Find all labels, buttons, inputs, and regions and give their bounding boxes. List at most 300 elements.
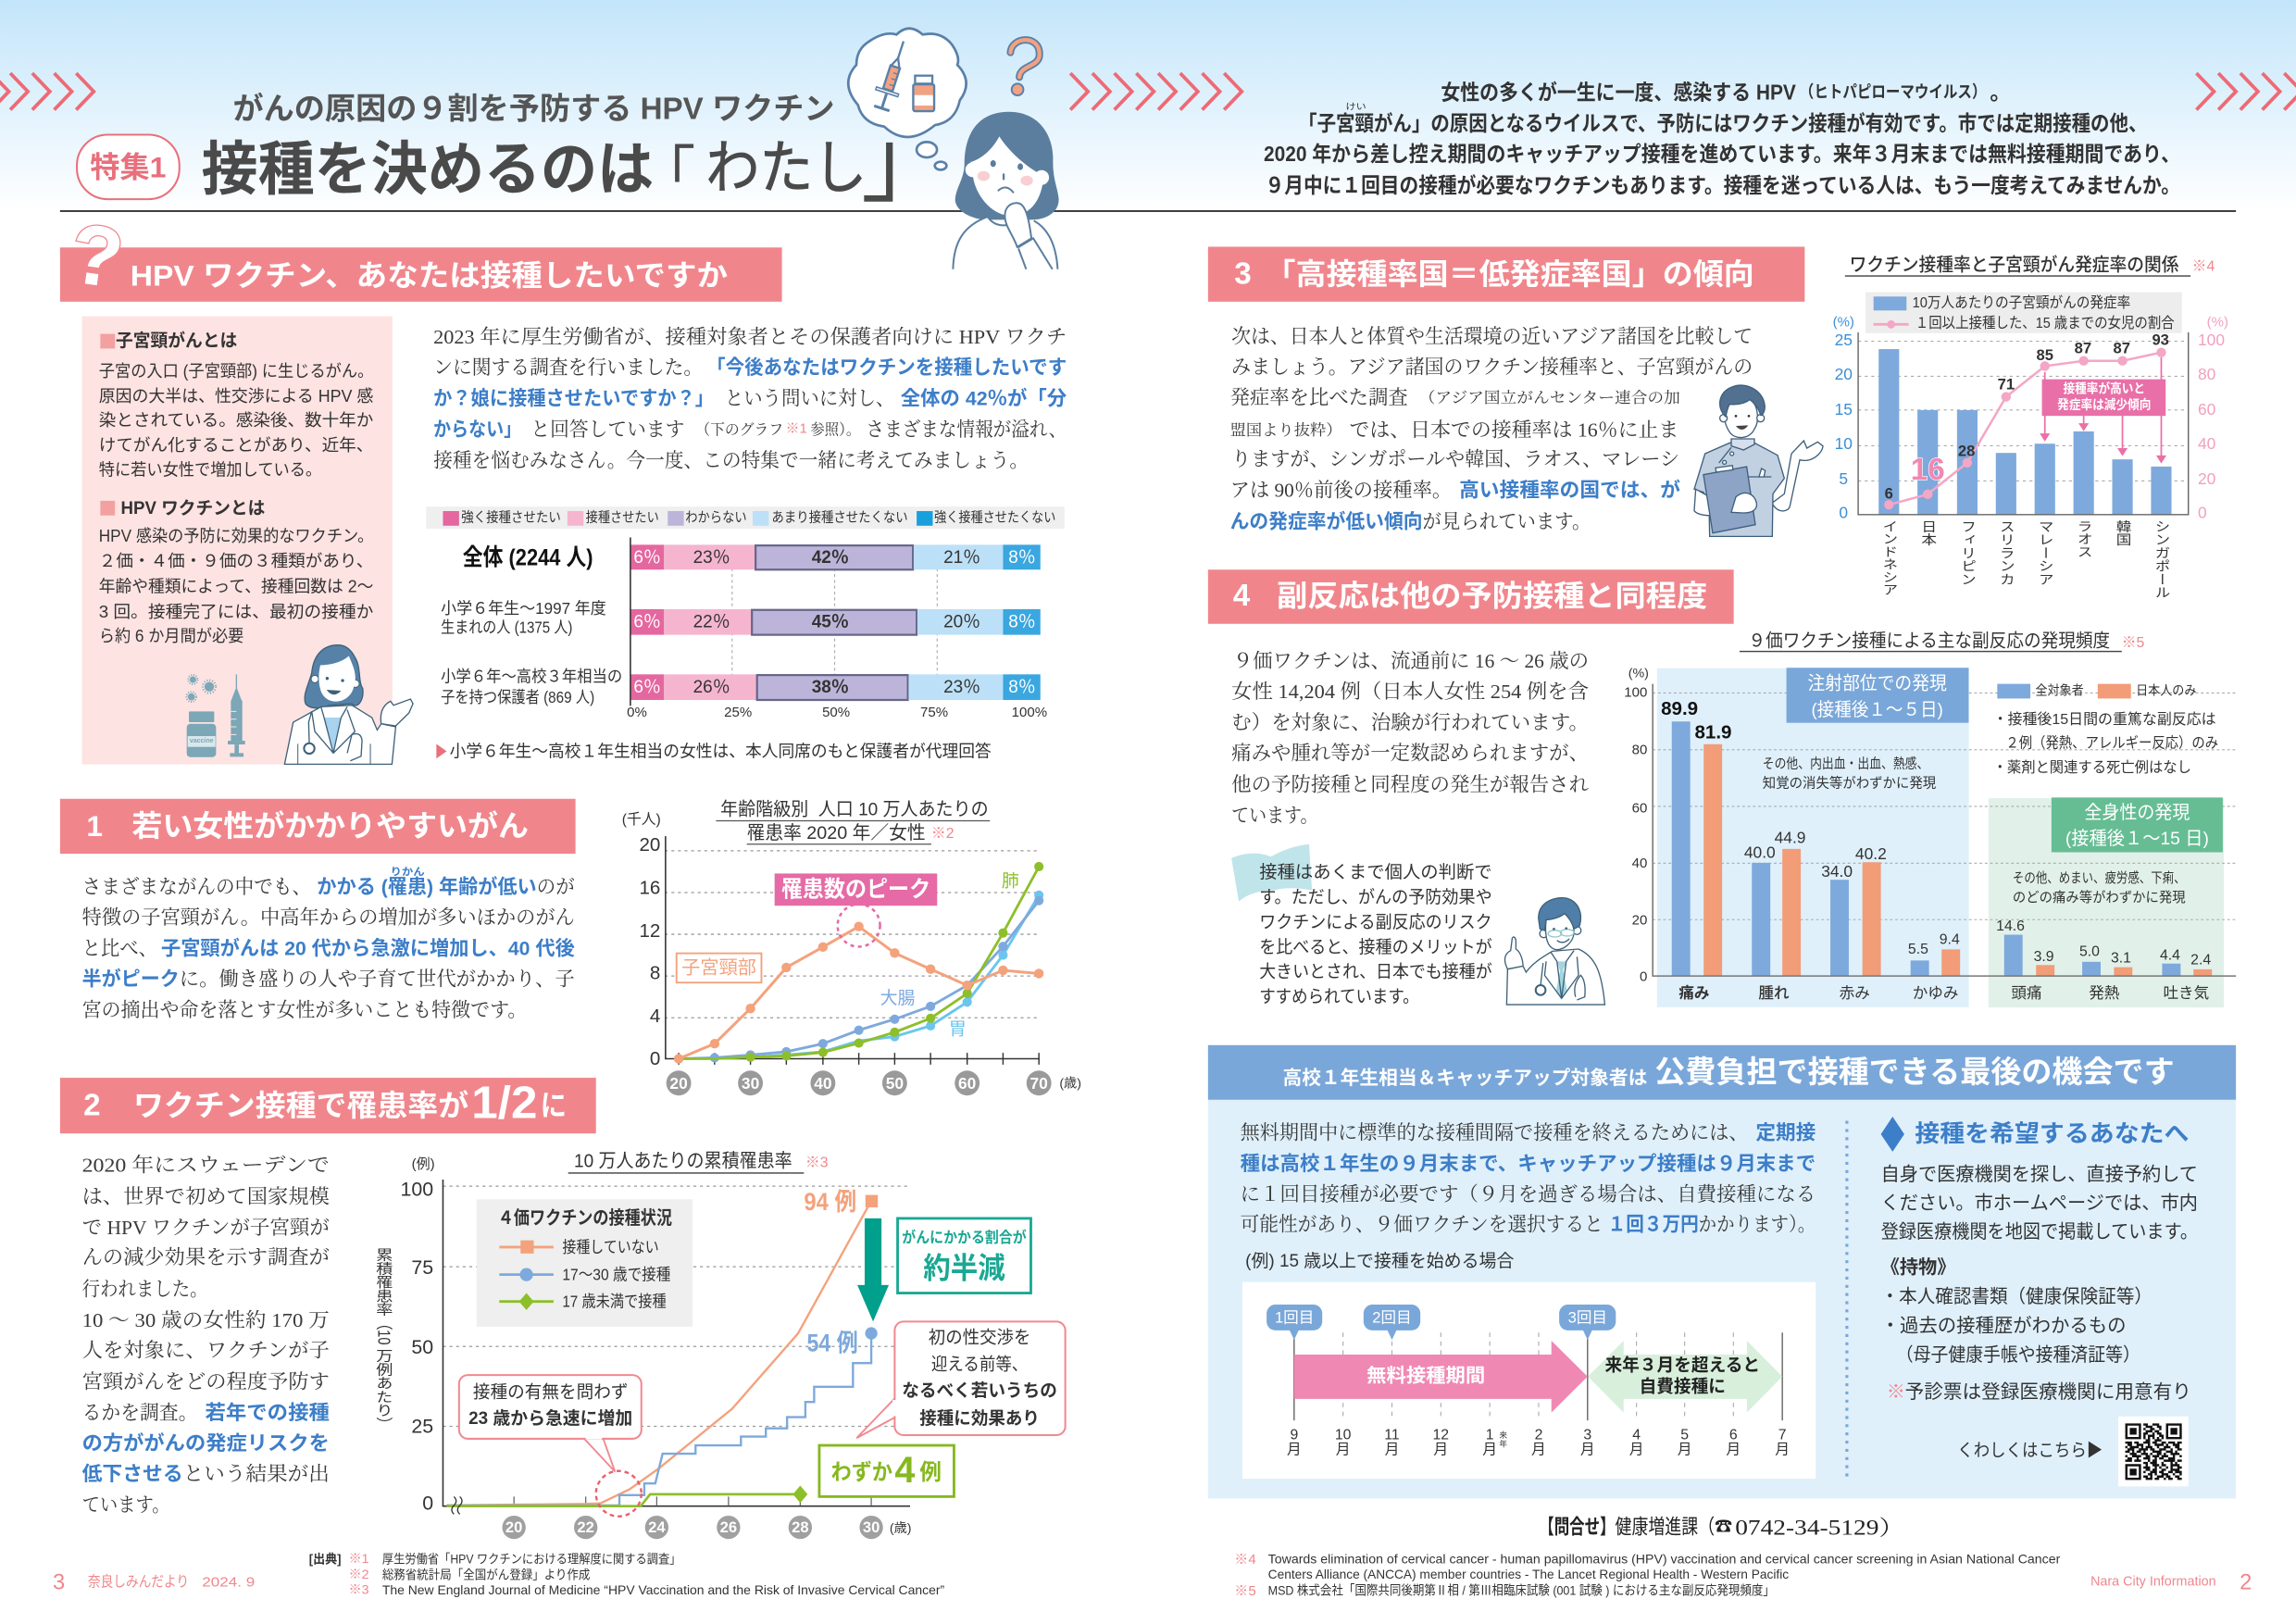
section header 2: に	[541, 1089, 567, 1122]
right axis: 100	[2198, 331, 2225, 349]
bar value labels	[1661, 698, 2211, 968]
age markers: 20	[505, 1518, 522, 1536]
section 1 body text: 子宮頸がんは 20 代から急激に増加し、40 代後	[161, 936, 575, 959]
illustration: thought bubble, question mark and thinking woman	[848, 29, 1059, 269]
chevrons: left	[0, 73, 94, 110]
panel: definitions	[82, 317, 413, 765]
series name labels: 大腸	[880, 988, 916, 1008]
main title: わたし	[705, 136, 867, 201]
axis break mark	[452, 1496, 462, 1514]
month labels: 4	[1632, 1427, 1641, 1443]
panel header	[1208, 1045, 2236, 1100]
marker: dose 3	[1559, 1305, 1616, 1340]
chart: vaccination rate vs incidence	[1833, 255, 2228, 599]
month labels: 6	[1729, 1427, 1738, 1443]
bar row: guardians	[630, 674, 1041, 700]
intro body text: か？娘に接種させたいですか？」	[433, 388, 714, 410]
section 2 body text	[82, 1154, 330, 1516]
references	[1234, 1552, 2061, 1599]
intro lead text: 。	[1990, 81, 2011, 105]
age markers: 28	[792, 1518, 809, 1536]
references: Towards elimination of cervical cancer - human papillomavirus (HPV) vaccination and cervical cancer screening in Asian National Cancer	[1268, 1552, 2061, 1567]
right axis: (%)	[2207, 314, 2228, 330]
row labels: 全体 (2244 人)	[463, 545, 593, 571]
line value labels: 87	[2075, 339, 2091, 356]
panel header: 公費負担で接種できる最後の機会です	[1654, 1056, 2175, 1090]
section 2 body text: ています。	[82, 1493, 169, 1516]
legend: 接種していない	[562, 1238, 659, 1256]
age circles: 70	[1030, 1074, 1048, 1093]
intro body text: からない」	[433, 418, 521, 441]
chart: adverse reactions	[1624, 631, 2236, 1007]
section header 1: 1	[86, 809, 103, 843]
country labels	[1880, 519, 2170, 599]
note about proxy answers: 小学６年生～高校１年生相当の女性は、本人同席のもと保護者が代理回答	[450, 742, 992, 760]
series name labels: 胃	[949, 1019, 967, 1039]
panel: systemic reactions	[1989, 798, 2224, 1007]
panel: injection-site reactions	[1657, 668, 1969, 1007]
timeline panel	[1242, 1282, 1816, 1479]
instructions text: 自身で医療機関を探し、直接予約して	[1881, 1164, 2198, 1185]
left axis: 15	[1835, 400, 1853, 418]
panel text: かかります）。	[1699, 1214, 1816, 1236]
note: injection site: 知覚の消失等がわずかに発現	[1763, 775, 1936, 792]
category labels: かゆみ	[1913, 984, 1958, 1002]
references: ※5	[1234, 1583, 1256, 1599]
intro body text: 接種を悩むみなさん。今一度、この特集で一緒に考えてみましょう。	[433, 449, 1029, 471]
row labels: 生まれの人 (1375 人)	[441, 618, 572, 637]
section 3 body text	[1230, 325, 1753, 532]
footer left	[53, 1571, 255, 1595]
female doctor	[284, 645, 413, 764]
bar row: all respondents: 21％	[943, 548, 980, 568]
contact line: 【問合せ】	[1539, 1515, 1616, 1538]
bar row: grade 6 to 1997 births: 20％	[943, 613, 980, 632]
right axis: 20	[2198, 469, 2215, 488]
section 4 body text: む）を対象に、治験が行われています。	[1231, 712, 1589, 734]
percent axis labels: 100%	[1012, 705, 1047, 720]
footer left: 奈良しみんだより	[88, 1573, 189, 1590]
callout: about half: 約半減	[923, 1252, 1005, 1285]
section 1 body text: 半がピーク	[82, 968, 180, 991]
percent axis labels	[627, 705, 1047, 720]
callout: only 4 cases: 例	[919, 1460, 942, 1485]
subtitle: がんの原因の９割を予防する HPV ワクチン	[232, 91, 835, 126]
chart title	[716, 800, 990, 844]
month labels: 1	[1486, 1427, 1494, 1443]
instructions text: ※	[1887, 1382, 1905, 1403]
row labels: 小学６年～高校３年相当の	[441, 668, 622, 686]
section 1 body text	[82, 866, 575, 1021]
note text: を比べると、接種のメリットが	[1259, 937, 1492, 957]
country labels: 日本	[1919, 519, 1937, 546]
bar value labels: 5.5	[1908, 942, 1928, 957]
footer right: Nara City Information	[2090, 1574, 2216, 1590]
intro body text: 全体の 42％が「分	[901, 387, 1067, 410]
callout: rapid increase from 23: 接種の有無を問わず	[473, 1382, 629, 1403]
note text: 接種はあくまで個人の判断で	[1259, 862, 1492, 882]
callout: higher rate lower incidence: 発症率は減少傾向	[2057, 396, 2151, 413]
intro body text: 「今後あなたはワクチンを接種したいです	[706, 356, 1067, 379]
month labels: 5	[1680, 1427, 1689, 1443]
chart title: ※3	[805, 1155, 829, 1170]
QR code	[2118, 1417, 2189, 1486]
chart: cumulative incidence: 94 例	[804, 1188, 856, 1216]
bar value labels: 14.6	[1996, 918, 2025, 934]
panel: definitions: けてがん化することがあり、近年、	[99, 436, 373, 455]
age circles: 30	[742, 1074, 759, 1093]
month labels: 月	[1531, 1442, 1546, 1457]
section header 4: 4	[1233, 579, 1251, 613]
chart title: 年齢階級別 人口 10 万人あたりの	[720, 800, 989, 820]
chart title: ワクチン接種率と子宮頸がん発症率の関係	[1850, 255, 2179, 275]
marker: dose 1	[1267, 1305, 1322, 1340]
panel text: (例) 15 歳以上で接種を始める場合	[1245, 1251, 1514, 1271]
section 4 body text: ています。	[1231, 805, 1317, 827]
note: injection site: その他、内出血・出血、熱感、	[1763, 756, 1928, 771]
y axis numbers	[401, 1178, 433, 1515]
age markers: 24	[648, 1518, 666, 1536]
age markers: 22	[577, 1518, 594, 1536]
icon: vial	[913, 76, 934, 111]
series: vaccinated age 17 to 30	[446, 1327, 878, 1505]
panel: definitions: ２価・４価・９価の３種類があり、	[99, 552, 373, 570]
section header 2: 1/2	[471, 1079, 537, 1129]
section 2 body text: で HPV ワクチンが子宮頸が	[82, 1217, 330, 1239]
sources list: ※3	[348, 1583, 369, 1598]
y axis labels: 4	[650, 1006, 660, 1027]
row labels: 子を持つ保護者 (869 人)	[441, 688, 594, 706]
right axis: 0	[2198, 504, 2207, 522]
chart legend	[426, 506, 1065, 529]
section 3 body text: 次は、日本人と体質や生活環境の近いアジア諸国を比較して	[1231, 325, 1753, 347]
section 1 body text: りかん	[391, 866, 425, 878]
header: injection site: (接種後１～５日)	[1811, 700, 1943, 720]
note text: すすめられています。	[1259, 988, 1419, 1007]
panel: definitions: 子宮の入口 (子宮頸部) に生じるがん。	[99, 362, 373, 381]
arrow: free period: 無料接種期間	[1366, 1366, 1485, 1387]
category labels: 赤み	[1840, 984, 1870, 1002]
callout: only 4 cases: わずか	[831, 1460, 892, 1485]
y axis numbers: 25	[411, 1415, 433, 1437]
panel text: 無料期間中に標準的な接種間隔で接種を終えるためには、	[1241, 1122, 1748, 1144]
icon: question mark	[1010, 40, 1040, 95]
bar value labels: 2.4	[2190, 953, 2211, 968]
label: cervix	[677, 954, 761, 982]
intro body text: ※1	[786, 420, 807, 436]
chevrons: center	[1070, 73, 1242, 110]
bar row: all respondents: 23％	[693, 548, 730, 568]
callout: early vaccination effective: 初の性交渉を	[929, 1327, 1030, 1347]
bar value labels: 40.2	[1855, 844, 1887, 863]
month labels: 月	[1580, 1442, 1595, 1457]
category labels: 痛み	[1678, 983, 1710, 1002]
bar value labels: 40.0	[1744, 843, 1776, 861]
chart legend: あまり接種させたくない	[772, 510, 908, 526]
percent axis labels: 75%	[920, 705, 948, 720]
section 3 body text: りますが、シンガポールや韓国、ラオス、マレーシ	[1231, 448, 1679, 470]
arrow: self-pay period: 自費接種に	[1640, 1377, 1726, 1397]
y axis labels: 0	[1640, 968, 1647, 984]
bar row: grade 6 to 1997 births	[630, 609, 1041, 635]
y axis labels: 60	[1632, 801, 1647, 817]
month labels: 月	[1678, 1442, 1692, 1457]
legend: 17 歳未満で接種	[562, 1293, 667, 1311]
y axis labels	[639, 834, 660, 1069]
right axis: 40	[2198, 434, 2215, 453]
legend: 17～30 歳で接種	[562, 1266, 670, 1284]
icon: open book	[1231, 844, 1312, 901]
age markers: (歳)	[890, 1520, 912, 1536]
panel text: １回３万円	[1608, 1214, 1699, 1236]
y axis labels: 80	[1632, 742, 1647, 757]
category labels: 腫れ	[1758, 984, 1790, 1002]
month labels: 年	[1499, 1438, 1507, 1448]
note text: す。ただし、がんの予防効果や	[1259, 887, 1492, 907]
icon: viruses	[186, 675, 216, 702]
intro body text	[433, 326, 1067, 471]
section 3 body text: では、日本での接種率は 16％に止ま	[1349, 419, 1678, 442]
legend: ４価ワクチンの接種状況	[498, 1208, 672, 1229]
panel: definitions: ら約 6 か月間が必要	[99, 627, 243, 645]
age markers	[503, 1516, 912, 1539]
age circles: 20	[669, 1074, 688, 1093]
note: systemic: その他、めまい、疲労感、下痢、	[2013, 870, 2186, 886]
section 4 body text: 痛みや腫れ等が一定数認められますが、	[1231, 743, 1589, 765]
right axis: 60	[2198, 400, 2215, 418]
y axis labels: 8	[650, 962, 660, 983]
main title: 接種を決めるのは	[201, 137, 654, 202]
section 3 body text: （アジア国立がんセンター連合の加	[1419, 389, 1680, 406]
percent axis labels: 25%	[724, 705, 752, 720]
chart title: 10 万人あたりの累積罹患率	[574, 1151, 792, 1172]
left axis: 0	[1839, 504, 1848, 522]
section 2 body text: という結果が出	[183, 1463, 330, 1485]
y axis numbers: 75	[411, 1256, 433, 1279]
section 2 body text: 10 ～ 30 歳の女性約 170 万	[82, 1309, 330, 1331]
series: stomach	[679, 891, 1043, 1059]
arrow: reduction	[857, 1218, 889, 1321]
sources list: ※2	[348, 1568, 369, 1582]
thinking woman	[953, 112, 1059, 269]
contact line	[1539, 1515, 1904, 1539]
bar value labels: 3.1	[2111, 951, 2131, 967]
chart title: ※2	[931, 826, 955, 842]
callout: higher rate lower incidence: 接種率が高いと	[2064, 381, 2145, 397]
line value labels: 93	[2152, 331, 2169, 348]
country labels: スリランカ	[1997, 519, 2015, 586]
series name labels: 肺	[1002, 871, 1019, 892]
callout: early vaccination effective: 迎える前等、	[931, 1355, 1028, 1375]
sources list: [出典]	[309, 1551, 342, 1566]
y axis numbers: 50	[411, 1336, 433, 1358]
section 3 body text: みましょう。アジア諸国のワクチン接種率と、子宮頸がんの	[1231, 356, 1753, 379]
sources list: ※1	[348, 1552, 369, 1567]
section 2 body text: んの減少効果を示す調査が	[82, 1246, 330, 1268]
section 2 body text: るかを調査。	[82, 1402, 198, 1424]
intro body text: 2023 年に厚生労働省が、接種対象者とその保護者向けに HPV ワクチ	[433, 326, 1067, 348]
panel: definitions: HPV ワクチンとは	[121, 498, 265, 518]
month labels: 10	[1335, 1427, 1352, 1443]
section 4 body text: 他の予防接種と同程度の発生が報告され	[1231, 774, 1590, 796]
main title	[201, 111, 952, 213]
month labels: 11	[1384, 1427, 1400, 1443]
intro lead text: 女性の多くが一生に一度、感染する HPV	[1441, 81, 1797, 105]
section header 4	[1208, 569, 1734, 624]
arrow: self-pay period: 来年３月を超えると	[1604, 1355, 1760, 1376]
section 2 body text: 低下させる	[82, 1463, 183, 1485]
y axis labels: 40	[1632, 856, 1647, 871]
top sky gradient background	[0, 0, 2296, 212]
bar row: guardians: 6％	[633, 678, 661, 697]
main title: 」	[861, 111, 952, 213]
intro body text: と回答しています	[530, 418, 684, 441]
y axis title: 累積罹患率（10 万例あたり）	[374, 1248, 393, 1430]
series: vaccinated under 17	[446, 1486, 807, 1506]
note text	[1259, 862, 1492, 1007]
line: vaccination rate	[1884, 347, 2166, 509]
label: cervix: 子宮頸部	[681, 957, 756, 978]
legend: 全対象者	[2035, 683, 2084, 699]
thought bubble	[848, 29, 967, 169]
bar row: all respondents: 8％	[1008, 548, 1036, 568]
y axis labels: (%)	[1628, 667, 1649, 681]
illustration: nurse with clipboard	[1694, 385, 1823, 536]
section header 3: 3	[1234, 256, 1252, 291]
section 1 body text: のが	[537, 876, 575, 898]
panel text: に１回目接種が必要です（９月を過ぎる場合は、自費接種になる	[1241, 1183, 1816, 1206]
icons and female doctor illustration	[186, 645, 413, 764]
month labels: 月	[1775, 1442, 1790, 1457]
month labels: 月	[1385, 1442, 1399, 1457]
footer right: 2	[2240, 1571, 2252, 1595]
section 3 body text: 発症率を比べた調査	[1230, 387, 1408, 409]
month labels: 来	[1499, 1430, 1507, 1440]
bar value labels: 34.0	[1821, 862, 1853, 881]
section header 4: 副反応は他の予防接種と同程度	[1277, 580, 1707, 613]
intro lead text: けい	[1346, 103, 1366, 113]
y axis labels	[1624, 667, 1649, 984]
section 2 body text: 人を対象に、ワクチンが子	[82, 1340, 330, 1362]
y axis labels: 16	[639, 878, 660, 899]
bar row: grade 6 to 1997 births: 8％	[1008, 613, 1036, 632]
chart legend: 接種させたい	[586, 510, 659, 526]
category labels: 発熱	[2089, 984, 2120, 1002]
icon: vaccine vial	[187, 711, 216, 757]
main title: 「	[637, 142, 695, 206]
legend	[1866, 293, 2182, 333]
instructions text	[1881, 1164, 2198, 1403]
section 2 body text: 若年での接種	[205, 1402, 330, 1424]
section 4 body text: 女性 14,204 例（日本人女性 254 例を含	[1231, 681, 1589, 703]
section header 1: 若い女性がかかりやすいがん	[131, 809, 529, 843]
section header 2: 2	[83, 1089, 101, 1123]
header: systemic: (接種後１～15 日)	[2065, 829, 2209, 849]
y axis numbers: 100	[401, 1178, 433, 1200]
intro lead text	[1264, 81, 2180, 197]
chart title: 罹患率 2020 年／女性	[747, 823, 926, 843]
intro lead text: （ヒトパピローマウイルス）	[1800, 83, 1986, 102]
month labels: 月	[1287, 1442, 1302, 1457]
bar row: all respondents: 42％	[812, 548, 849, 568]
serious reactions note	[1993, 711, 2218, 776]
bars: Japanese only	[1703, 744, 2212, 976]
y axis labels: 0	[650, 1048, 660, 1069]
chart: cumulative incidence: (例)	[412, 1156, 435, 1172]
panel: definitions: 3 回。接種完了には、最初の接種か	[99, 603, 373, 621]
right axis: 80	[2198, 365, 2215, 383]
instructions text: ・過去の接種歴がわかるもの	[1881, 1315, 2127, 1336]
sources list	[309, 1551, 944, 1598]
label: peak: 罹患数のピーク	[781, 876, 930, 902]
callout: higher rate lower incidence	[2042, 380, 2165, 416]
country labels: ラオス	[2075, 519, 2092, 558]
panel: last chance with public funding	[1208, 1045, 2236, 1498]
link to details: くわしくはこちら▶	[1957, 1442, 2103, 1461]
note: systemic	[2013, 870, 2186, 906]
chart title: ※4	[2192, 258, 2215, 274]
sources list: The New England Journal of Medicine “HPV Vaccination and the Risk of Invasive Cervical Cancer”	[382, 1583, 944, 1597]
callout: early vaccination effective: なるべく若いうちの	[902, 1380, 1057, 1401]
bar row: grade 6 to 1997 births: 22％	[693, 613, 730, 632]
legend	[477, 1199, 693, 1327]
header: systemic	[2052, 797, 2223, 852]
y axis labels: 20	[639, 834, 660, 856]
right axis	[2198, 314, 2228, 522]
section 3 body text: 高い接種率の国では、が	[1459, 478, 1680, 501]
instructions text: ・本人確認書類（健康保険証等）	[1881, 1286, 2152, 1307]
instructions text: （母子健康手帳や接種済証等）	[1896, 1344, 2140, 1366]
country labels: シンガポール	[2152, 519, 2170, 599]
row labels	[441, 545, 622, 706]
chart title: ９価ワクチン接種による主な副反応の発現頻度	[1748, 631, 2110, 652]
chevrons: right	[2196, 73, 2296, 110]
callout: early vaccination effective: 接種に効果あり	[919, 1408, 1040, 1429]
intro body text: 参照）。	[810, 421, 860, 439]
section 4 body text: ９価ワクチンは、流通前に 16 ～ 26 歳の	[1233, 650, 1589, 672]
contact line: 0742-34-5129）	[1735, 1516, 1904, 1539]
row labels: 小学６年生～1997 年度	[441, 599, 606, 618]
section header: HPV vaccine question: HPV ワクチン、あなたは接種したいですか	[131, 258, 728, 292]
bar value labels: 89.9	[1661, 698, 1698, 719]
month labels: 月	[1629, 1442, 1644, 1457]
section header 3: 「高接種率国＝低発症率国」の傾向	[1266, 257, 1754, 291]
month labels: 9	[1290, 1427, 1298, 1443]
left axis: 20	[1835, 365, 1853, 383]
callout: rapid increase from 23: 23 歳から急速に増加	[468, 1407, 632, 1429]
month labels: 月	[1433, 1442, 1448, 1457]
illustration: male doctor	[1504, 898, 1604, 1005]
month labels	[1287, 1427, 1790, 1457]
month labels: 月	[1482, 1442, 1497, 1457]
category labels: 頭痛	[2011, 984, 2042, 1002]
callout: about half	[898, 1218, 1030, 1293]
series: lung	[679, 862, 1043, 1062]
section header 1	[60, 799, 576, 854]
feature badge	[77, 135, 180, 199]
callout: only 4 cases	[819, 1445, 954, 1496]
legend: １回以上接種した、15 歳までの女児の割合	[1915, 315, 2175, 331]
chart: stacked bars of vaccination intent	[426, 506, 1065, 720]
callout: early vaccination effective	[856, 1321, 1066, 1438]
chart legend: わからない	[685, 510, 747, 526]
left axis: (%)	[1833, 314, 1854, 330]
month labels: 月	[1336, 1442, 1351, 1457]
references: MSD 株式会社「国際共同後期第Ⅱ相 / 第Ⅲ相臨床試験 (001 試験 ) における主な副反応発現頻度」	[1268, 1582, 1775, 1598]
chart title: ※5	[2122, 635, 2145, 651]
instructions text: 《持物》	[1881, 1257, 1956, 1279]
footer right	[2090, 1571, 2252, 1595]
